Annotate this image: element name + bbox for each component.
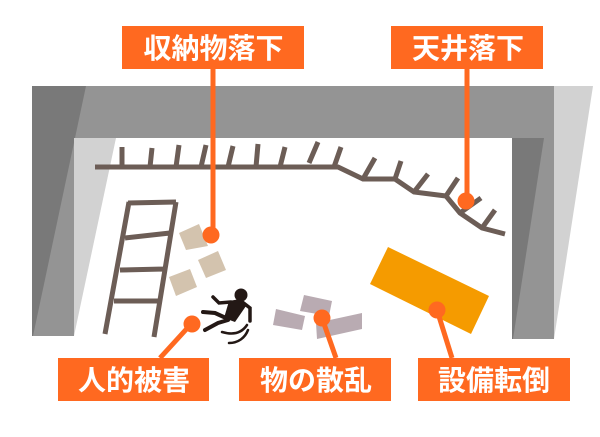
icon: falling person bbox=[203, 288, 250, 343]
building frame bbox=[32, 86, 593, 339]
callout: 物の散乱 bbox=[239, 310, 391, 401]
callout: 人的被害 bbox=[58, 316, 209, 401]
callout: 収納物落下 bbox=[122, 26, 304, 244]
callout: 天井落下: 天井落下 bbox=[412, 33, 524, 64]
fallen storage boxes bbox=[169, 224, 226, 296]
falling ceiling bbox=[95, 142, 505, 234]
ladder bbox=[105, 202, 176, 337]
callout: 設備転倒 bbox=[418, 302, 570, 401]
toppled equipment bbox=[370, 247, 489, 334]
callout: 収納物落下: 収納物落下 bbox=[143, 33, 284, 64]
scattered objects bbox=[273, 295, 362, 339]
callout: 人的被害: 人的被害 bbox=[78, 365, 190, 396]
callout: 天井落下 bbox=[391, 26, 543, 210]
callout: 設備転倒: 設備転倒 bbox=[438, 365, 550, 396]
callout: 物の散乱: 物の散乱 bbox=[260, 365, 372, 396]
